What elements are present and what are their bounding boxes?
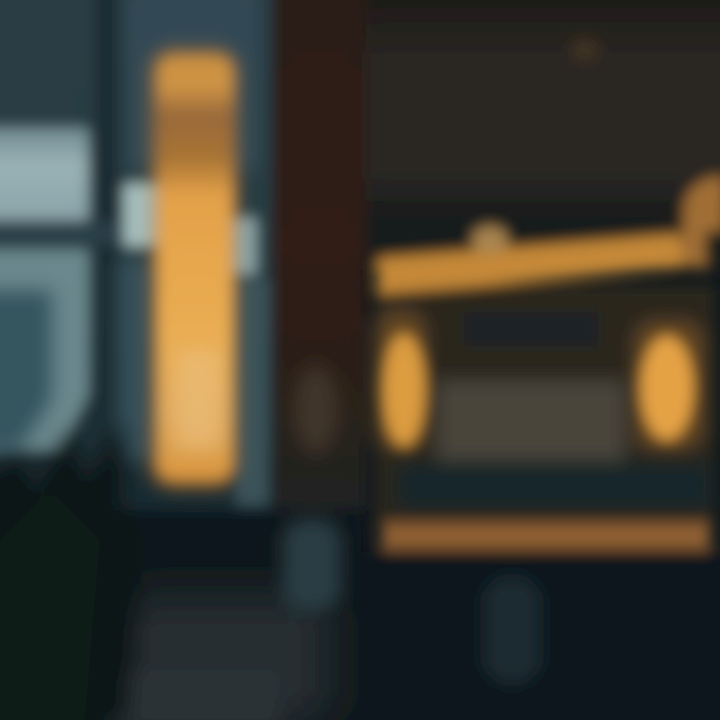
window pane beside lamp left bbox=[124, 184, 158, 246]
bar lamp left bbox=[376, 310, 426, 450]
bottles on bar bbox=[400, 380, 710, 507]
foreground seat bottom bbox=[110, 670, 280, 720]
window pane lower bbox=[0, 250, 88, 450]
wood column bbox=[272, 0, 366, 510]
window top right bbox=[125, 0, 260, 170]
window crossbar bbox=[0, 222, 120, 244]
small ceiling light bbox=[570, 38, 600, 62]
bar lamp right bbox=[634, 320, 704, 450]
window lower right strip bbox=[236, 280, 268, 505]
foreground post bbox=[284, 520, 340, 610]
panel: dark wall right bbox=[362, 0, 720, 270]
tall glowing lamp bbox=[150, 48, 238, 488]
window dark patch bbox=[0, 290, 52, 450]
beam ornament bbox=[472, 226, 508, 254]
window mullion bbox=[95, 0, 119, 460]
bar counter bbox=[382, 522, 710, 550]
panel: dark foreground bbox=[0, 366, 720, 720]
window pane bright upper bbox=[0, 128, 88, 220]
window pane beside lamp right bbox=[232, 218, 256, 274]
panel: left window bbox=[0, 0, 280, 540]
beam right curve bbox=[682, 176, 720, 270]
column base glow bbox=[294, 366, 338, 454]
glowing shelf beam bbox=[378, 176, 720, 294]
icon: foreground plant bbox=[0, 425, 140, 720]
lamp pale highlight bbox=[176, 350, 220, 450]
panel: bar back area bbox=[375, 285, 715, 520]
foreground seat right bbox=[482, 575, 542, 685]
window lower mid bbox=[118, 260, 154, 460]
foreground seat left bbox=[120, 595, 330, 720]
dark bar sign bbox=[464, 312, 598, 346]
